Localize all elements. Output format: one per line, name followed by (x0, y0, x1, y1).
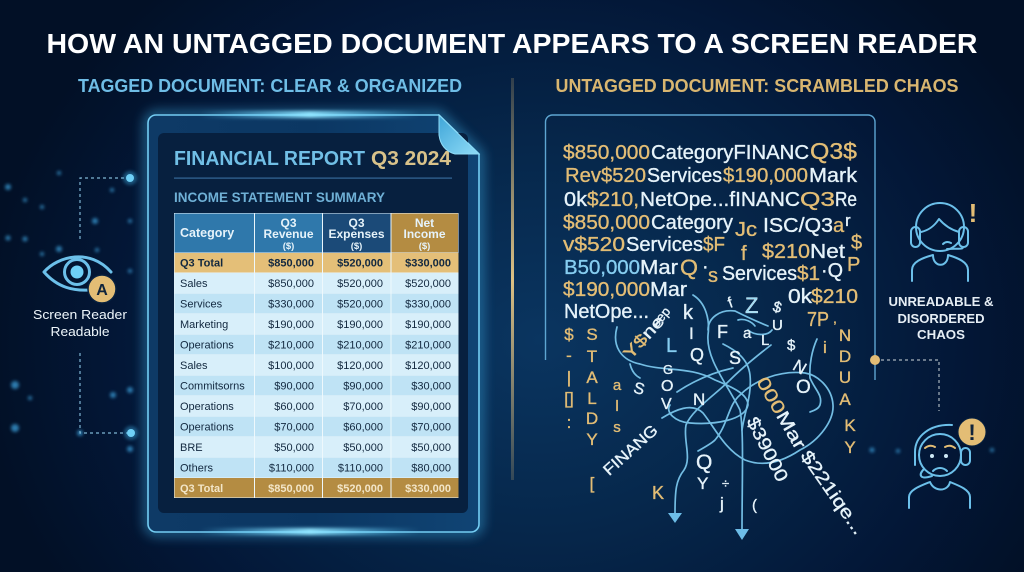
scrambled text block: $190,000 (723, 165, 808, 187)
scattered letters: , (833, 310, 837, 326)
scattered letters: Z (745, 293, 758, 318)
table row: Operations: $70,000 (274, 422, 314, 434)
table row: Operations (180, 340, 451, 352)
label: unreadable and disordered chaos: CHAOS (917, 328, 965, 342)
heading: tagged document: TAGGED DOCUMENT: CLEAR & ORGANIZED (78, 76, 462, 96)
alert badge: ! (968, 420, 976, 445)
table row: Commitsorns: $30,000 (411, 380, 451, 392)
table row: Q3 Total (180, 258, 451, 270)
table row: Q3 Total footer: $520,000 (337, 483, 383, 495)
table row: Q3 Total footer: $330,000 (405, 483, 451, 495)
gold letter columns: a (613, 377, 622, 394)
scattered letters: S (729, 348, 741, 368)
table row: Q3 Total: $520,000 (337, 258, 383, 270)
table row: Operations (180, 401, 451, 413)
table header: ($) (283, 241, 294, 252)
row fills (174, 253, 458, 498)
table header: Net (415, 216, 434, 230)
table header: Income (403, 227, 446, 241)
scattered letters: L (666, 335, 677, 357)
icon: distressed headset user (909, 418, 986, 508)
right connector (870, 355, 939, 411)
scrambled text block: Q3$ (810, 138, 857, 164)
central divider (511, 78, 514, 480)
scattered letters: Q (696, 451, 712, 474)
gold letter columns: A (586, 368, 598, 387)
scrambled text block: r (845, 211, 851, 230)
scrambled text block: $850,000 (563, 142, 650, 164)
scattered letters: ÷ (722, 476, 729, 491)
gold letter columns: D (839, 347, 851, 366)
gold letter columns: L (587, 389, 597, 408)
table row: BRE: $50,000 (274, 442, 314, 454)
table row: Operations: $210,000 (268, 340, 314, 352)
scattered letters: j (719, 494, 724, 513)
table row: Operations: $60,000 (343, 422, 383, 434)
scrambled text block: $F (703, 234, 725, 256)
alert mark: ! (969, 198, 977, 228)
table row: Operations (180, 422, 451, 434)
table header: Category (180, 226, 234, 240)
table row: Marketing: Marketing (180, 319, 228, 331)
scrambled text block: Rev$520 (565, 165, 646, 187)
table row: Operations: $210,000 (337, 340, 383, 352)
scrambled text block: k (683, 302, 694, 324)
table row: Operations: $90,000 (411, 401, 451, 413)
table row: Commitsorns (180, 380, 451, 392)
scrambled text block: CategoryFINANC (651, 142, 809, 164)
table row: Marketing: $190,000 (337, 319, 383, 331)
table row: Services: Services (180, 298, 223, 310)
scattered letters: ( (752, 497, 757, 514)
table row: BRE: $50,000 (411, 442, 451, 454)
table row: Marketing (180, 319, 451, 331)
scattered letters: I (689, 324, 694, 343)
table row: Operations: $70,000 (343, 401, 383, 413)
document heading: Q3 2024 (371, 148, 452, 170)
scattered letters: F (717, 322, 728, 342)
table row: Sales: $120,000 (405, 360, 451, 372)
gold letter columns: K (844, 416, 856, 435)
gold letter columns: : (567, 413, 571, 432)
scattered letters (600, 293, 869, 538)
scrambled text block: P (847, 254, 860, 276)
tangled reading order arrows (616, 295, 833, 540)
scrambled text block: Services (626, 234, 703, 256)
table row: Others: $80,000 (411, 462, 451, 474)
icon: eye with A badge (44, 257, 116, 303)
scrambled text block: · (702, 256, 709, 278)
scattered letters: a (743, 325, 752, 342)
table row: Marketing: $190,000 (405, 319, 451, 331)
arrowhead left (668, 513, 682, 523)
financial table (174, 213, 458, 498)
gold letter columns: T (587, 347, 597, 366)
gold letter columns: N (839, 326, 851, 345)
table row: Sales: Sales (180, 360, 208, 372)
scrambled text block: v$520 (563, 234, 625, 256)
table row: Sales: $120,000 (337, 360, 383, 372)
scrambled text block: Net (810, 241, 845, 263)
gold letter columns: U (839, 368, 851, 387)
scrambled text block: f (741, 243, 747, 265)
scattered letters: O (661, 378, 673, 395)
scrambled text block: $1 (797, 263, 820, 285)
table header: Revenue (263, 227, 314, 241)
table header: ($) (419, 241, 430, 252)
left connector bottom (80, 353, 138, 440)
scrambled text block: $210, (587, 189, 639, 211)
scrambled text block: B50,000 (564, 257, 640, 279)
scattered letters: V (661, 396, 672, 413)
scattered letters: N (693, 390, 705, 409)
scrambled text block: Mark (809, 165, 858, 187)
folded corner (439, 115, 479, 154)
gold letter columns: [ (590, 474, 595, 493)
table row: Commitsorns: $90,000 (274, 380, 314, 392)
table row: Sales: $100,000 (268, 360, 314, 372)
table row: Q3 Total footer: Q3 Total (180, 483, 223, 495)
scrambled text block: Services (647, 165, 722, 187)
scattered letters: S (632, 380, 646, 399)
panel: scrambled chaos frame (546, 115, 875, 380)
table row: Services: $520,000 (337, 298, 383, 310)
scrambled text block: s (708, 265, 718, 287)
gold letter columns: - (566, 346, 572, 365)
gold letter columns: S (586, 325, 598, 344)
label: screen reader readable (33, 307, 128, 339)
table header: Q3 (348, 216, 365, 230)
scattered letters: f (726, 294, 736, 312)
scrambled text block: 7P (807, 309, 829, 331)
scrambled text block: Jc (735, 219, 757, 241)
scrambled text block: $850,000 (563, 212, 650, 234)
label: screen reader readable: Screen Reader (33, 307, 128, 322)
panel: tagged document (148, 111, 479, 535)
scrambled text block: ·Q (821, 260, 843, 282)
table row: Q3 Total: $850,000 (268, 258, 314, 270)
table header: ($) (351, 241, 362, 252)
scattered letters: FINANG (600, 422, 662, 479)
icon: eye with A badge: A (96, 282, 108, 299)
scrambled text block: $210 (811, 286, 858, 308)
gold letter columns: A (839, 390, 851, 409)
table row: Others (180, 462, 451, 474)
scattered letters: i (823, 338, 827, 357)
gold letter columns: D (586, 409, 598, 428)
scattered letters: U (772, 317, 783, 334)
table row: Services (180, 298, 451, 310)
scrambled text block: NetOpe...fINANC (640, 189, 800, 211)
left connector top (80, 171, 137, 242)
scrambled text block: Services (722, 263, 797, 285)
table row: Services: $330,000 (268, 298, 314, 310)
scrambled text block: Mar (640, 257, 678, 279)
scattered letters: $ (787, 337, 796, 354)
table row: Commitsorns: Commitsorns (180, 380, 245, 392)
table row: Sales: $520,000 (405, 278, 451, 290)
scrambled text block: $210 (762, 241, 810, 263)
table row: Others: $110,000 (269, 462, 314, 474)
label: unreadable and disordered chaos: DISORDERED (898, 312, 984, 326)
table row: Q3 Total footer (180, 483, 451, 495)
table header: Expenses (328, 227, 385, 241)
scattered letters: Q (690, 345, 704, 365)
scrambled text block: Category (651, 212, 733, 234)
scattered letters: eep (648, 304, 673, 330)
title: HOW AN UNTAGGED DOCUMENT APPEARS TO A SCREEN READER (46, 28, 978, 59)
scrambled text block: a (833, 215, 845, 237)
table row: Q3 Total: $330,000 (405, 258, 451, 270)
table row: Sales (180, 278, 451, 290)
label: unreadable and disordered chaos: UNREADABLE & (888, 295, 994, 309)
scattered letters: L (761, 332, 769, 349)
gold letter columns: [] (564, 389, 574, 408)
table header: Q3 (280, 216, 297, 230)
table row: Services: $330,000 (405, 298, 451, 310)
gold letter columns: $ (564, 325, 574, 344)
scattered letters: N (790, 356, 810, 379)
table row: Marketing: $190,000 (268, 319, 314, 331)
table row: BRE: BRE (180, 442, 203, 454)
table row: Operations: Operations (180, 340, 234, 352)
heading: untagged document: UNTAGGED DOCUMENT: SCRAMBLED CHAOS (556, 76, 958, 96)
scrambled text block: Re (835, 189, 857, 211)
table row: Operations: $70,000 (411, 422, 451, 434)
table row: Others: $110,000 (338, 462, 383, 474)
table row: Operations: $60,000 (274, 401, 314, 413)
table row: Operations: Operations (180, 422, 234, 434)
table row: Sales: $520,000 (337, 278, 383, 290)
scrambled text block: 0k (564, 189, 588, 211)
table row: Sales: Sales (180, 278, 208, 290)
gold letter columns: s (613, 419, 621, 436)
scattered letters: O (796, 377, 811, 398)
table row: BRE (180, 442, 451, 454)
gold letter columns: l (615, 398, 619, 415)
gold letter columns: K (652, 483, 664, 503)
scrambled text block: Q (680, 255, 698, 280)
scrambled text block: ISC/Q3 (763, 215, 833, 237)
scrambled text block: $190,000 (563, 279, 650, 301)
scrambled text block (563, 138, 862, 331)
table row: Q3 Total: Q3 Total (180, 258, 223, 270)
scrambled text block: Mar (650, 279, 687, 301)
scrambled text block: $ (851, 232, 862, 254)
scrambled text block: NetOpe... (564, 301, 649, 323)
table subtitle: INCOME STATEMENT SUMMARY (174, 190, 385, 205)
table row: Commitsorns: $90,000 (343, 380, 383, 392)
scattered letters: Y$ne (619, 312, 668, 363)
table row: BRE: $50,000 (343, 442, 383, 454)
inner document sheet (158, 133, 468, 513)
scattered letters: Y (697, 474, 708, 493)
arrowhead right (735, 529, 749, 540)
scattered letters: $39000 (743, 414, 792, 485)
table row: Q3 Total footer: $850,000 (268, 483, 314, 495)
scrambled text block: Q3 (800, 189, 835, 211)
gold letter columns: Y (844, 438, 856, 457)
label: screen reader readable: Readable (50, 324, 110, 339)
scattered letters: 000 Mar (753, 373, 810, 453)
icon: headset user with alert (911, 198, 977, 281)
document heading: FINANCIAL REPORT (174, 148, 365, 170)
scattered letters: $221iqe... (797, 447, 869, 538)
gold letter columns: Y (586, 430, 598, 449)
table row: Sales: $850,000 (268, 278, 314, 290)
scattered letters: G (663, 362, 673, 377)
table row: Sales (180, 360, 451, 372)
table row: Others: Others (180, 462, 214, 474)
table row: Operations: Operations (180, 401, 234, 413)
table header (174, 214, 458, 252)
gold letter columns (564, 325, 856, 503)
scattered letters: $ (771, 298, 784, 317)
label: unreadable and disordered chaos (888, 295, 994, 342)
table row: Operations: $210,000 (405, 340, 451, 352)
gold letter columns: | (567, 368, 571, 387)
scrambled text block: 0k (788, 286, 813, 308)
